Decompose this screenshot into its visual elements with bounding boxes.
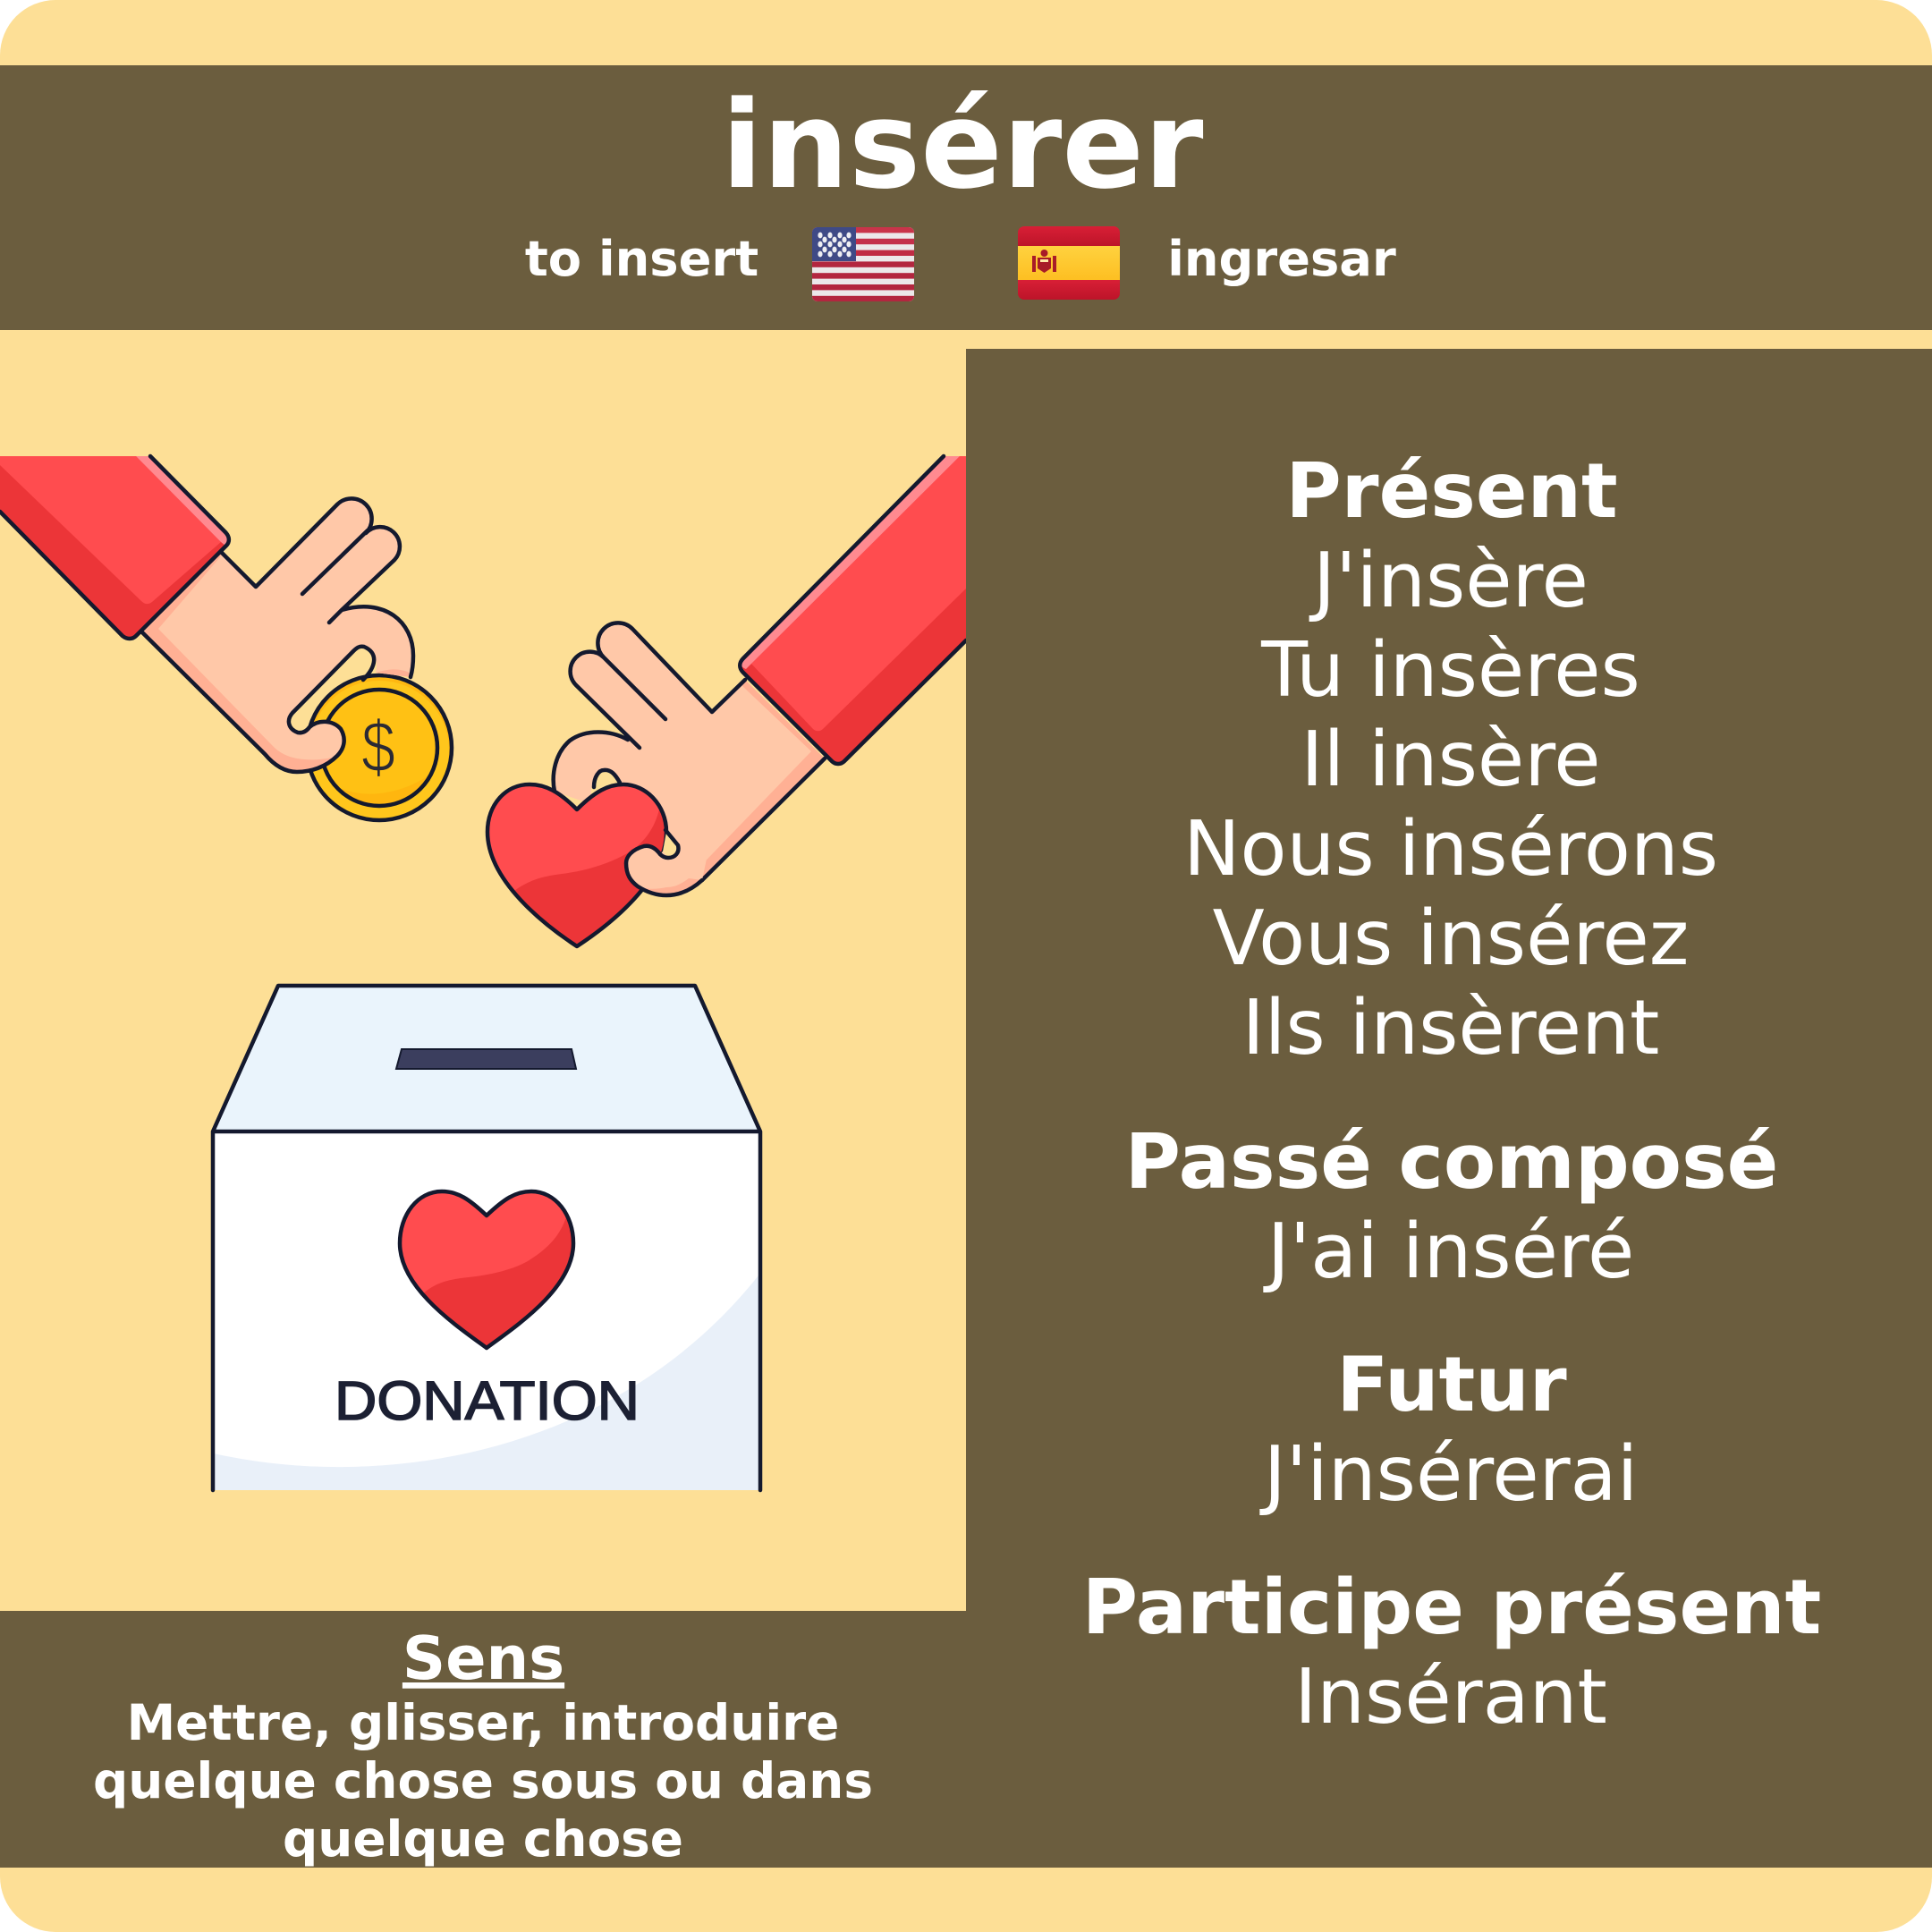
icon: heart on box: [397, 1190, 576, 1351]
icon: sleeve: [0, 456, 229, 639]
icon: hand: [554, 623, 825, 895]
future tense: J'insérerai: [1259, 1430, 1638, 1519]
title: insérer: [721, 75, 1204, 216]
future tense: Futur: [1336, 1341, 1567, 1429]
future tense: [1259, 1356, 1631, 1515]
Spanish translation: ingresar: [1167, 231, 1396, 287]
icon: right arm giving heart: [487, 456, 966, 957]
present tense: Nous insérons: [1183, 805, 1718, 894]
box label: DONATION: [335, 1370, 640, 1431]
panel: meaning: [0, 1611, 966, 1868]
present tense: Vous insérez: [1213, 894, 1689, 983]
box front: [213, 1131, 760, 1490]
icon: coin: $: [361, 707, 395, 788]
illustration: donation: [0, 456, 966, 1490]
panel: header band: [0, 65, 1932, 330]
present participle: [1089, 1572, 1819, 1724]
icon: heart: [487, 784, 680, 957]
box lid: [213, 986, 760, 1131]
icon: Spanish flag: [1018, 226, 1120, 300]
box slot: [396, 1049, 576, 1069]
meaning heading: Sens: [402, 1623, 564, 1693]
present participle: Insérant: [1294, 1653, 1607, 1741]
icon: coin: [305, 675, 452, 825]
present tense: Présent: [1285, 447, 1618, 536]
icon: US flag: [812, 227, 914, 301]
icon: thumb over heart: [594, 770, 707, 895]
icon: sleeve: [740, 456, 966, 764]
present tense: [1183, 447, 1718, 1072]
meaning text: quelque chose sous ou dans: [93, 1752, 873, 1809]
meaning text: quelque chose: [283, 1810, 683, 1868]
present tense: Il insère: [1301, 716, 1601, 804]
present tense: Ils insèrent: [1242, 984, 1659, 1072]
meaning text: [93, 1694, 873, 1868]
past tense: J'ai inséré: [1263, 1208, 1634, 1296]
past tense: Passé composé: [1125, 1118, 1778, 1207]
English translation: to insert: [525, 231, 758, 287]
past tense: [1125, 1118, 1778, 1296]
present participle: Participe présent: [1082, 1563, 1821, 1652]
panel: conjugation: [966, 349, 1932, 1868]
icon: donation box: [213, 986, 760, 1490]
present tense: J'insère: [1309, 537, 1589, 625]
present tense: Tu insères: [1260, 626, 1640, 715]
meaning text: Mettre, glisser, introduire: [127, 1694, 839, 1751]
icon: hand: [142, 498, 413, 772]
icon: left arm giving coin: [0, 456, 452, 825]
